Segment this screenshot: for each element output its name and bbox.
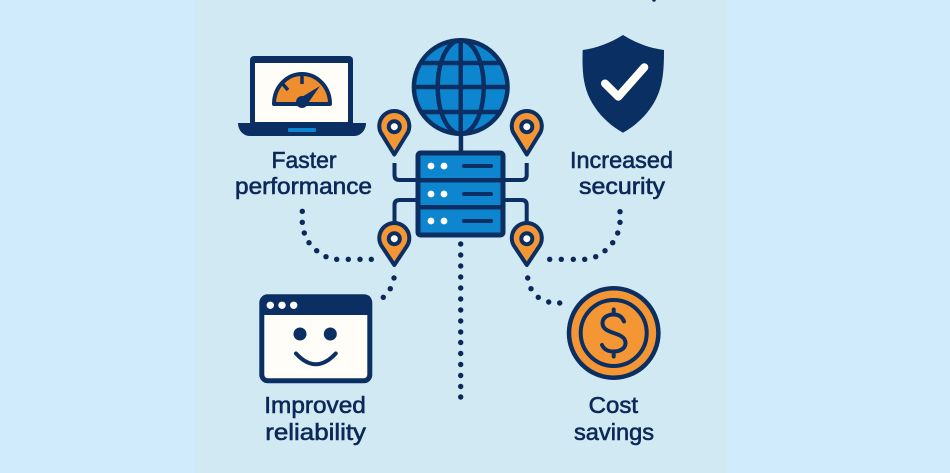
heading: cost savings: Cost: [589, 392, 639, 418]
heading: faster performance: [235, 147, 372, 199]
icon: globe: [414, 40, 508, 134]
connectors: server to pins: [394, 163, 527, 224]
heading: improved reliability: Improved: [264, 392, 366, 418]
heading: increased security: [570, 147, 673, 199]
heading: cost savings: savings: [574, 419, 654, 445]
heading: faster performance: Faster: [272, 147, 337, 173]
icon: location pin bottom right: [512, 223, 542, 265]
icon: browser window with smiley: [261, 295, 371, 381]
dotted connector: faster performance: [300, 209, 374, 262]
icon: server rack: [417, 153, 504, 235]
dotted connector: increased security: [547, 209, 623, 262]
icon: location pin bottom left: [379, 223, 409, 265]
dotted connector: vertical centre: [458, 241, 463, 400]
icon: location pin top right: [512, 111, 542, 154]
dotted connector: improved reliability: [381, 275, 397, 300]
dotted connector: cost savings: [525, 275, 562, 306]
icon: dollar coin: [569, 288, 658, 378]
icon: shield with check mark: [583, 35, 664, 133]
heading: increased security: Increased: [570, 147, 673, 173]
heading: cost savings: [574, 392, 654, 445]
connector: globe to server: [459, 134, 463, 152]
panel: central background: [195, 0, 727, 473]
heading: increased security: security: [579, 173, 666, 199]
icon: laptop with speedometer: [238, 56, 366, 136]
heading: improved reliability: [264, 392, 367, 445]
heading: faster performance: performance: [235, 173, 372, 199]
icon: location pin top left: [379, 111, 409, 154]
heading: improved reliability: reliability: [265, 419, 367, 445]
